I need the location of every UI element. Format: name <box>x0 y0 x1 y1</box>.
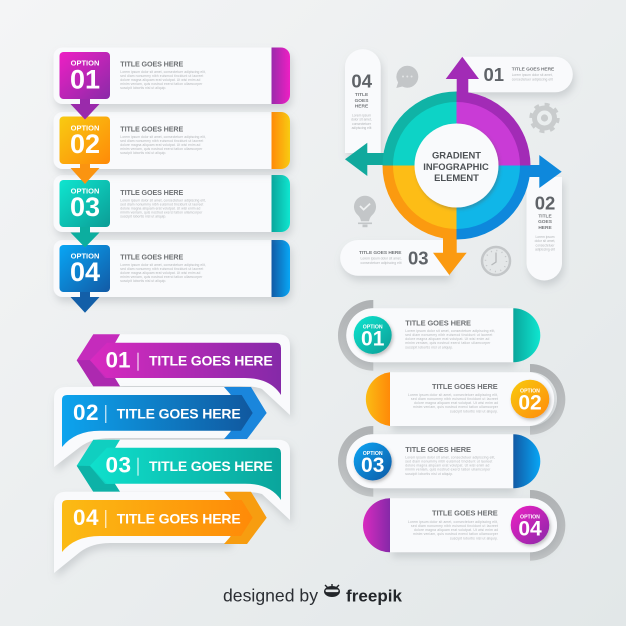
row 4: 04 <box>518 518 542 540</box>
row 2: Lorem ipsum dolor sit amet, consectetuer adipiscing elit, <box>408 393 498 397</box>
pill 04: consectetuer <box>352 122 372 126</box>
center label: INFOGRAPHIC <box>423 161 489 172</box>
card 2: sed diam nonummy nibh euismod tincidunt ut laoreet <box>120 139 203 143</box>
card 2: OPTION <box>71 124 99 132</box>
ribbon 1: 01 <box>106 348 130 373</box>
card 1: Lorem ipsum dolor sit amet, consectetuer adipiscing elit, <box>120 70 206 74</box>
ribbon 4: TITLE GOES HERE <box>117 510 241 526</box>
ribbon 2: 02 <box>73 400 98 425</box>
card 2: Lorem ipsum dolor sit amet, consectetuer adipiscing elit, <box>120 135 206 139</box>
ribbon 4 <box>54 492 267 573</box>
ribbon 3 <box>77 440 290 520</box>
card 4: minim veniam, quis nostrud exerci tation ullamcorper <box>120 275 203 279</box>
row 1: OPTION <box>363 324 383 330</box>
ribbon 1 <box>77 334 290 415</box>
pill 02: 02 <box>535 192 555 213</box>
card 4: Lorem ipsum dolor sit amet, consectetuer adipiscing elit, <box>120 263 206 267</box>
pill 01: TITLE GOES HERE <box>512 67 555 73</box>
pill 04: TITLE <box>355 92 369 98</box>
row 4: sed diam nonummy nibh euismod tincidunt ut laoreet <box>411 524 498 528</box>
pill 04: 04 <box>351 71 373 92</box>
card 4 <box>54 240 290 313</box>
row 1: suscipit lobortis nisl ut aliquip. <box>405 346 453 350</box>
row 3 <box>338 426 540 497</box>
row 2: suscipit lobortis nisl ut aliquip. <box>450 410 498 414</box>
card 1: 01 <box>70 64 100 94</box>
pill 01: 01 <box>484 64 504 85</box>
footer credit: freepik <box>346 586 403 606</box>
card 1 <box>54 48 290 120</box>
pill 03 <box>340 240 449 276</box>
row 3: suscipit lobortis nisl ut aliquip. <box>405 472 453 476</box>
pill 04 <box>345 49 381 153</box>
ribbon 2: TITLE GOES HERE <box>117 405 241 421</box>
pill 02: dolor sit amet, <box>535 239 555 243</box>
donut chart <box>382 92 530 240</box>
card 1: sed diam nonummy nibh euismod tincidunt ut laoreet <box>120 74 203 78</box>
row 4: TITLE GOES HERE <box>432 508 498 518</box>
pill 04: dolor sit amet, <box>351 118 372 122</box>
pill 04: Lorem ipsum <box>352 114 371 118</box>
row 1: Lorem ipsum dolor sit amet, consectetuer adipiscing elit, <box>405 329 495 333</box>
pill 02: HERE <box>538 225 552 231</box>
row 4 <box>363 490 565 561</box>
card 3: minim veniam, quis nostrud exerci tation ullamcorper <box>120 210 203 214</box>
card 3: TITLE GOES HERE <box>120 188 184 197</box>
row 3: TITLE GOES HERE <box>405 445 471 454</box>
card 4: OPTION <box>71 252 99 260</box>
row 3: Lorem ipsum dolor sit amet, consectetuer adipiscing elit, <box>405 456 495 460</box>
pill 02: TITLE <box>538 214 552 220</box>
card 3: sed diam nonummy nibh euismod tincidunt ut laoreet <box>120 202 203 206</box>
row 2: sed diam nonummy nibh euismod tincidunt ut laoreet <box>411 397 498 401</box>
row 4: suscipit lobortis nisl ut aliquip. <box>450 536 498 540</box>
pill 02: consectetuer <box>536 243 555 247</box>
pill 02 <box>526 177 562 280</box>
card 4: TITLE GOES HERE <box>120 252 184 262</box>
arrow 02 blue <box>525 155 562 188</box>
row 2: 02 <box>518 392 542 414</box>
card 3: OPTION <box>71 186 99 196</box>
card 1: dolore magna aliquam erat volutpat. Ut wisi enim ad <box>120 78 200 82</box>
ribbon 2 <box>54 387 267 467</box>
card 4: dolore magna aliquam erat volutpat. Ut wisi enim ad <box>120 271 200 275</box>
pill 01 <box>462 57 573 92</box>
row 3: 03 <box>361 454 384 477</box>
row 4: OPTION <box>520 514 540 520</box>
pill 04: HERE <box>355 104 369 110</box>
pill 03: Lorem ipsum dolor sit amet, <box>360 256 402 260</box>
card 4: 04 <box>70 257 100 287</box>
row 1: 01 <box>361 328 385 350</box>
pill 02: adipiscing elit <box>535 248 555 252</box>
card 3: suscipit lobortis nisl ut aliquip. <box>120 214 166 218</box>
card 2: minim veniam, quis nostrud exerci tation ullamcorper <box>120 147 203 151</box>
footer credit <box>223 584 403 606</box>
icon: gear <box>531 104 558 132</box>
pill 04: GOES <box>355 98 369 104</box>
row 4: minim veniam, quis nostrud exerci tation ullamcorper <box>413 532 499 536</box>
footer credit: designed by <box>223 586 318 606</box>
pill 03: TITLE GOES HERE <box>359 250 402 256</box>
center label <box>414 124 498 208</box>
row 3: sed diam nonummy nibh euismod tincidunt ut laoreet <box>405 460 492 464</box>
ribbon 3: 03 <box>106 453 131 478</box>
center label: GRADIENT <box>432 150 481 161</box>
pill 02: GOES <box>538 219 553 225</box>
ribbon 1: TITLE GOES HERE <box>149 353 273 369</box>
pill 03: 03 <box>408 247 429 268</box>
card 2: suscipit lobortis nisl ut aliquip. <box>120 151 166 155</box>
row 2: OPTION <box>520 388 540 394</box>
pill 02: Lorem ipsum <box>535 235 555 239</box>
card 2: TITLE GOES HERE <box>120 124 184 134</box>
card 3: Lorem ipsum dolor sit amet, consectetuer adipiscing elit, <box>120 198 206 202</box>
card 2: 02 <box>70 129 100 159</box>
row 2 <box>366 364 565 435</box>
pill 04: adipiscing elit <box>352 126 371 130</box>
card 3: dolore magna aliquam erat volutpat. Ut wisi enim ad <box>120 206 200 210</box>
arrow 03 orange <box>433 235 467 275</box>
ribbon 3: TITLE GOES HERE <box>149 458 273 474</box>
row 3: dolore magna aliquam erat volutpat. Ut wisi enim ad <box>405 464 489 468</box>
row 1: dolore magna aliquam erat volutpat. Ut wisi enim ad <box>405 337 489 341</box>
pill 01: consectetuer adipiscing elit <box>512 77 553 81</box>
panel: ribbon banners <box>54 334 290 573</box>
card 4: suscipit lobortis nisl ut aliquip. <box>120 279 166 283</box>
card 1: suscipit lobortis nisl ut aliquip. <box>120 86 166 90</box>
icon: freepik bee <box>324 584 340 597</box>
arrow 01 purple <box>446 57 479 95</box>
card 3 <box>54 175 290 248</box>
panel: rounded option rows <box>338 300 565 561</box>
row 1: minim veniam, quis nostrud exerci tation ullamcorper <box>405 341 491 345</box>
card 3: 03 <box>70 192 100 222</box>
center label: ELEMENT <box>434 172 479 183</box>
icon: chat bubble <box>396 66 418 88</box>
icon: clock <box>482 247 510 275</box>
arrow 04 teal <box>345 143 388 176</box>
card 1: TITLE GOES HERE <box>120 60 184 69</box>
card 2 <box>54 112 290 184</box>
row 4: dolore magna aliquam erat volutpat. Ut wisi enim ad <box>414 528 498 532</box>
card 2: dolore magna aliquam erat volutpat. Ut wisi enim ad <box>120 143 200 147</box>
panel: option cards list <box>54 48 290 313</box>
card 1: OPTION <box>71 59 99 68</box>
pill 03: consectetuer adipiscing elit <box>360 261 402 265</box>
card 4: sed diam nonummy nibh euismod tincidunt ut laoreet <box>120 267 203 271</box>
row 1: TITLE GOES HERE <box>405 319 471 328</box>
row 1 <box>338 300 540 371</box>
row 3: minim veniam, quis nostrud exerci tation ullamcorper <box>405 468 491 472</box>
row 4: Lorem ipsum dolor sit amet, consectetuer adipiscing elit, <box>408 520 498 524</box>
card 1: minim veniam, quis nostrud exerci tation ullamcorper <box>120 82 203 86</box>
pill 01: Lorem ipsum dolor sit amet, <box>512 73 553 77</box>
row 3: OPTION <box>363 451 383 457</box>
panel: circular diagram <box>340 49 573 280</box>
icon: light bulb <box>354 196 376 227</box>
row 2: minim veniam, quis nostrud exerci tation ullamcorper <box>413 405 499 409</box>
ribbon 4: 04 <box>73 505 99 530</box>
row 2: dolore magna aliquam erat volutpat. Ut wisi enim ad <box>414 401 498 405</box>
row 2: TITLE GOES HERE <box>432 382 498 391</box>
row 1: sed diam nonummy nibh euismod tincidunt ut laoreet <box>405 333 492 337</box>
